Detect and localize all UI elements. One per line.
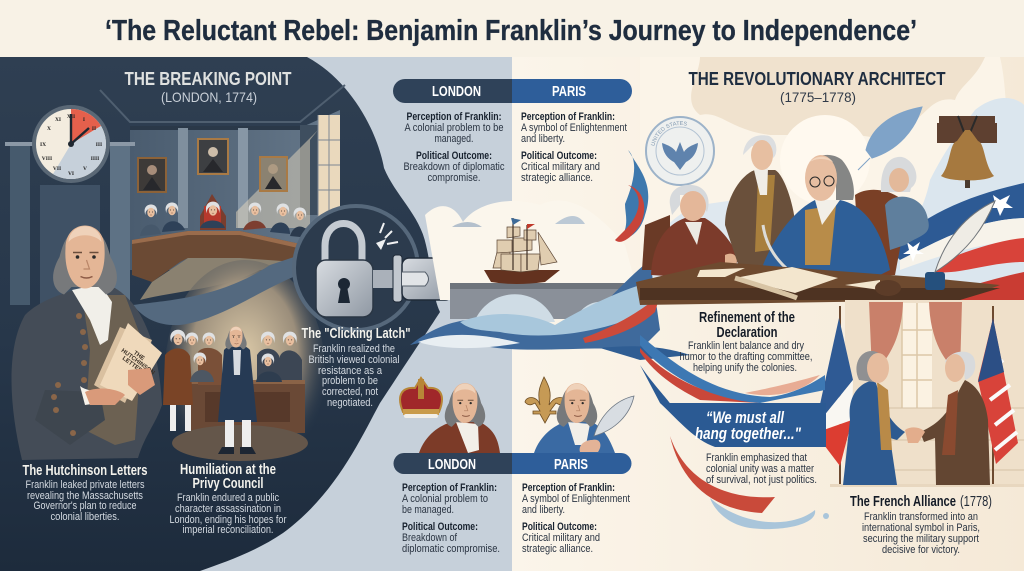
- illustration: writing table and documents: [636, 201, 1000, 305]
- text: colonial unity: of survival, not just politics.: [706, 474, 817, 486]
- clock numerals: II: [92, 126, 96, 132]
- text: humiliation at the Privy Council: Privy Council: [192, 476, 264, 492]
- text: refinement of the Declaration: Declaration: [716, 325, 778, 341]
- bystanders: [163, 330, 302, 431]
- illustration: wave ribbon from lock: [133, 255, 300, 325]
- text: the French alliance: decisive for victory.: [882, 544, 960, 556]
- figure: French minister shaking hands: [905, 352, 990, 485]
- text: refinement of the Declaration: [680, 310, 812, 374]
- text: the French alliance: The French Alliance: [850, 494, 956, 510]
- text: the French alliance: Franklin transformed into an: [864, 511, 978, 523]
- icon: feather: [858, 107, 922, 170]
- text: humiliation at the Privy Council: imperial reconciliation.: [182, 524, 274, 536]
- text: the French alliance: [850, 494, 992, 556]
- London column: Perception of Franklin:: [402, 482, 497, 494]
- Paris column: strategic alliance.: [521, 172, 593, 184]
- text: refinement of the Declaration: humor to the drafting committee,: [680, 351, 812, 363]
- the letters: THE: [132, 350, 145, 362]
- illustration: grandfather clock case: [5, 142, 135, 315]
- clock numerals: V: [83, 166, 87, 172]
- icon: royal crown: [400, 378, 442, 418]
- London column: compromise.: [428, 172, 480, 184]
- figure: Franklin in blue, Paris: [534, 383, 634, 453]
- banner: we must all hang together: [660, 403, 826, 447]
- waves: [410, 260, 660, 350]
- London column: [402, 482, 500, 555]
- text: the Hutchinson letters: Governor's plan to reduce: [34, 500, 136, 512]
- icon: liberty bell: [937, 116, 997, 188]
- heading: the revolutionary architect: (1775–1778): [780, 89, 856, 105]
- text: the clicking latch: Franklin realized the: [313, 343, 395, 355]
- text: colonial unity: Franklin emphasized that: [706, 452, 807, 464]
- pill: London: [393, 79, 512, 103]
- clock numerals: X: [47, 126, 51, 132]
- text: colonial unity: [706, 452, 817, 486]
- council table: [132, 231, 305, 300]
- text: refinement of the Declaration: Franklin lent balance and dry: [688, 340, 804, 352]
- panel: comparison table top: LONDON: [432, 84, 481, 100]
- panel: comparison table bottom: PARIS: [554, 457, 588, 473]
- portrait frames: [138, 139, 287, 192]
- the letters: HUTCHINSON: [120, 348, 156, 376]
- panel: comparison table bottom: [394, 453, 632, 555]
- London column: Breakdown of diplomatic: [404, 161, 505, 173]
- text: the Hutchinson letters: [22, 463, 148, 523]
- icon: American flag: [978, 306, 1018, 484]
- text: the French alliance: international symbol in Paris,: [862, 522, 980, 534]
- Paris column: Perception of Franklin:: [522, 482, 615, 494]
- banner: we must all hang together: “We must all: [706, 408, 785, 427]
- heading: the breaking point: (LONDON, 1774): [161, 89, 257, 105]
- clock numerals: VI: [68, 171, 74, 177]
- icon: great seal: UNITED STATES: [650, 121, 687, 146]
- text: humiliation at the Privy Council: [170, 462, 287, 536]
- text: humiliation at the Privy Council: Humiliation at the: [180, 462, 276, 478]
- Franklin standing: [218, 326, 257, 454]
- icon: French flag: [815, 306, 853, 484]
- figure: Franklin holding the Hutchinson letters: [11, 226, 162, 460]
- London column: Perception of Franklin:: [406, 111, 502, 123]
- clock numerals: XI: [55, 117, 61, 123]
- pill: Paris: [512, 79, 632, 103]
- panel: comparison table top: PARIS: [552, 84, 586, 100]
- bridge: [450, 283, 630, 322]
- panel: comparison table top: [393, 79, 632, 184]
- icon: fleur-de-lis: [525, 377, 566, 423]
- London column: Political Outcome:: [402, 521, 478, 533]
- clock numerals: VIII: [42, 156, 52, 162]
- clock numerals: III: [96, 142, 102, 148]
- text: the Hutchinson letters: Franklin leaked private letters: [26, 479, 145, 491]
- text: the clicking latch: problem to be: [322, 375, 378, 387]
- heading: the revolutionary architect: THE REVOLUTIONARY ARCHITECT: [688, 69, 946, 89]
- text: the clicking latch: resistance as a: [318, 365, 382, 377]
- illustration: American flag ribbon: [890, 183, 1024, 300]
- text: refinement of the Declaration: Refinement of the: [699, 310, 795, 326]
- London column: Political Outcome:: [416, 150, 492, 162]
- the letters: LETTERS: [121, 356, 146, 377]
- pill: Paris: [512, 453, 632, 474]
- panel: comparison table bottom: LONDON: [428, 457, 476, 473]
- text: humiliation at the Privy Council: London, ending his hopes for: [170, 514, 287, 526]
- figure: seated delegate in red: [642, 185, 740, 278]
- London column: A colonial problem to be: [404, 122, 504, 134]
- ship: [484, 218, 560, 284]
- text: the clicking latch: British viewed colonial: [308, 354, 400, 366]
- text: the clicking latch: [302, 326, 410, 409]
- the letters: [94, 323, 162, 403]
- ribbon: red and blue swoosh: [640, 335, 829, 529]
- Paris column: A symbol of Enlightenment: [521, 122, 627, 134]
- icon: great seal: [645, 116, 715, 186]
- London column: be managed.: [402, 504, 454, 516]
- clock numerals: VII: [53, 166, 61, 172]
- illustration: centre sky, clouds, ship and bridge: [410, 150, 690, 360]
- Paris column: strategic alliance.: [522, 543, 593, 555]
- Paris column: Political Outcome:: [522, 521, 597, 533]
- icon: sliding latch: [373, 223, 452, 302]
- banner: we must all hang together: hang together...": [695, 424, 802, 443]
- text: colonial unity: colonial unity was a matter: [706, 463, 814, 475]
- Paris column: [522, 482, 630, 555]
- panel: revolutionary backdrop: [640, 57, 1024, 300]
- Paris column: A symbol of Enlightenment: [522, 493, 630, 505]
- heading: the breaking point: [124, 69, 292, 105]
- panel: centre Paris side background: [512, 57, 1024, 571]
- panel: centre London side background: [150, 57, 512, 571]
- Paris column: [521, 111, 627, 184]
- London column: diplomatic compromise.: [402, 543, 500, 555]
- icon: quill: [594, 396, 634, 436]
- illustration: privy council chamber: [100, 85, 345, 300]
- text: the clicking latch: corrected, not: [322, 386, 378, 398]
- pill: London: [394, 453, 512, 474]
- text: the Hutchinson letters: revealing the Massachusetts: [27, 490, 144, 502]
- text: refinement of the Declaration: helping unify the colonies.: [693, 362, 797, 374]
- title: ‘The Reluctant Rebel: Benjamin Franklin’s Journey to Independence’: [105, 15, 917, 47]
- panel: the breaking point (dark London panel): [0, 57, 440, 571]
- clock numerals: [40, 114, 102, 177]
- figure: Franklin shaking hands: [843, 351, 905, 485]
- clock numerals: XII: [67, 114, 75, 120]
- judges and chair: [140, 194, 310, 238]
- London column: [404, 111, 505, 184]
- text: humiliation at the Privy Council: character assassination in: [175, 503, 281, 515]
- clock numerals: IX: [40, 142, 46, 148]
- text: humiliation at the Privy Council: Franklin endured a public: [177, 492, 279, 504]
- figure: back delegate: [881, 157, 929, 250]
- Paris column: and liberty.: [522, 504, 565, 516]
- clock numerals: IIII: [91, 156, 99, 162]
- illustration: Franklin humiliated before the Privy Council: [163, 260, 325, 480]
- Paris column: Perception of Franklin:: [521, 111, 615, 123]
- London column: managed.: [434, 133, 474, 145]
- illustration: committee red chair: [855, 190, 908, 275]
- Paris column: Critical military and: [521, 161, 600, 173]
- text: the clicking latch: negotiated.: [327, 397, 373, 409]
- icon: clock: [32, 105, 110, 183]
- London column: Breakdown of: [402, 532, 458, 544]
- heading: the breaking point: THE BREAKING POINT: [124, 69, 292, 89]
- text: the French alliance: securing the military support: [863, 533, 979, 545]
- heading: the revolutionary architect: [688, 69, 946, 105]
- figure: Franklin in red, London: [419, 383, 500, 453]
- text: the Hutchinson letters: colonial liberties.: [50, 511, 120, 523]
- clock numerals: I: [83, 117, 85, 123]
- text: the Hutchinson letters: The Hutchinson Letters: [22, 463, 148, 479]
- Paris column: Political Outcome:: [521, 150, 597, 162]
- icon: padlock in circle: [294, 206, 418, 330]
- illustration: French alliance room: [830, 300, 1024, 487]
- coat buttons: [51, 313, 88, 436]
- text: the clicking latch: The "Clicking Latch": [302, 326, 410, 342]
- figure: Franklin writing in blue: [763, 155, 890, 280]
- figure: standing delegate in brown: [725, 135, 795, 270]
- text: the French alliance: (1778): [960, 494, 992, 510]
- London column: A colonial problem to: [402, 493, 488, 505]
- Paris column: Critical military and: [522, 532, 600, 544]
- Paris column: and liberty.: [521, 133, 565, 145]
